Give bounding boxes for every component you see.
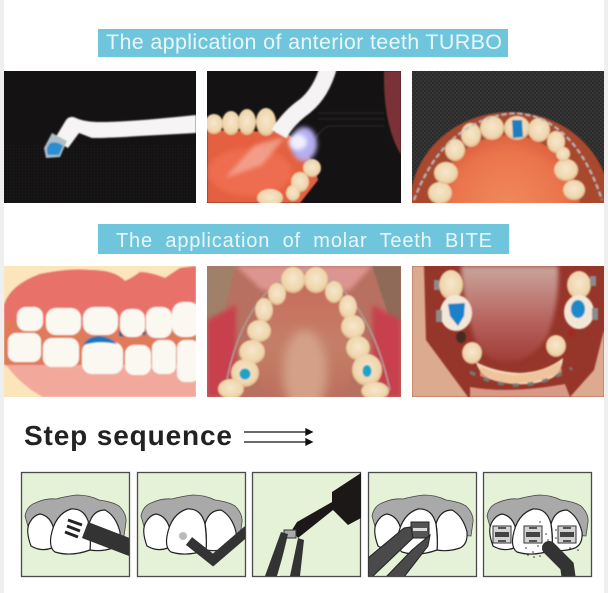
pink gum model xyxy=(207,130,318,203)
photo: lower arch with blue molars xyxy=(412,266,604,397)
teeth xyxy=(218,267,389,400)
gum arch xyxy=(412,111,604,203)
photo: upper arch with blue molars xyxy=(207,266,401,397)
posterior teeth xyxy=(439,270,591,364)
bracket held xyxy=(284,530,296,538)
blue bite on molar xyxy=(83,336,117,345)
wire xyxy=(414,113,602,200)
wire xyxy=(225,270,390,390)
step 4: placing bracket with tweezers xyxy=(368,472,476,577)
blue adhesive xyxy=(512,120,523,138)
bracket xyxy=(411,522,429,538)
photo: TURBO tool on black background xyxy=(4,71,196,203)
upper teeth xyxy=(17,302,200,338)
side brackets xyxy=(434,276,598,322)
banner text: The application of anterior teeth TURBO xyxy=(106,30,502,54)
heading: Step sequence: Step sequence xyxy=(24,420,232,451)
excess adhesive specks xyxy=(525,521,579,558)
upper teeth row xyxy=(205,108,321,207)
stripes xyxy=(65,520,82,537)
brackets on teeth xyxy=(493,526,576,543)
palate xyxy=(256,274,354,374)
tool tip with blue adhesive xyxy=(44,133,67,158)
lip corners xyxy=(207,266,236,322)
white tool shaft xyxy=(54,115,196,148)
blue adhesive left xyxy=(240,368,250,380)
tongue xyxy=(461,266,558,362)
blue-violet curing glow xyxy=(291,127,317,161)
blue adhesive right xyxy=(362,365,372,377)
dark extraction sites xyxy=(456,331,466,343)
molars with blue adhesive xyxy=(440,295,594,331)
cheeks xyxy=(207,305,236,397)
lower front teeth xyxy=(476,358,563,384)
photo: blue adhesive on anterior model xyxy=(412,71,604,203)
photo: curing light on anterior teeth xyxy=(205,65,401,207)
banner: anterior teeth TURBO xyxy=(98,29,508,57)
banner: molar teeth BITE xyxy=(98,224,509,254)
upper gum xyxy=(4,266,196,325)
teeth arch xyxy=(428,116,585,204)
curing light guide xyxy=(279,65,329,134)
syringe xyxy=(292,473,361,538)
photo: molar teeth model with blue bite xyxy=(4,266,200,397)
step 1: etching brush on tooth xyxy=(22,472,132,576)
tweezers xyxy=(368,527,413,577)
scaler tool xyxy=(549,548,569,580)
applicator xyxy=(85,530,132,548)
bent brush xyxy=(189,530,248,560)
step 2: bonding brush on tooth xyxy=(138,472,248,576)
wire and brackets xyxy=(470,368,572,385)
red shield xyxy=(384,71,401,155)
lower teeth xyxy=(8,333,199,382)
area between jaws xyxy=(4,320,196,365)
lower gum xyxy=(6,364,196,397)
double arrow xyxy=(244,429,312,445)
step 3: pliers and adhesive syringe xyxy=(252,472,361,576)
lower skin strip xyxy=(470,384,570,397)
brush tip xyxy=(179,532,187,540)
step 5: cleaning excess around brackets xyxy=(484,472,592,580)
banner text: The application of molar Teeth BITE xyxy=(116,230,492,252)
plier legs xyxy=(265,532,288,576)
skin at lip corners xyxy=(412,266,468,397)
